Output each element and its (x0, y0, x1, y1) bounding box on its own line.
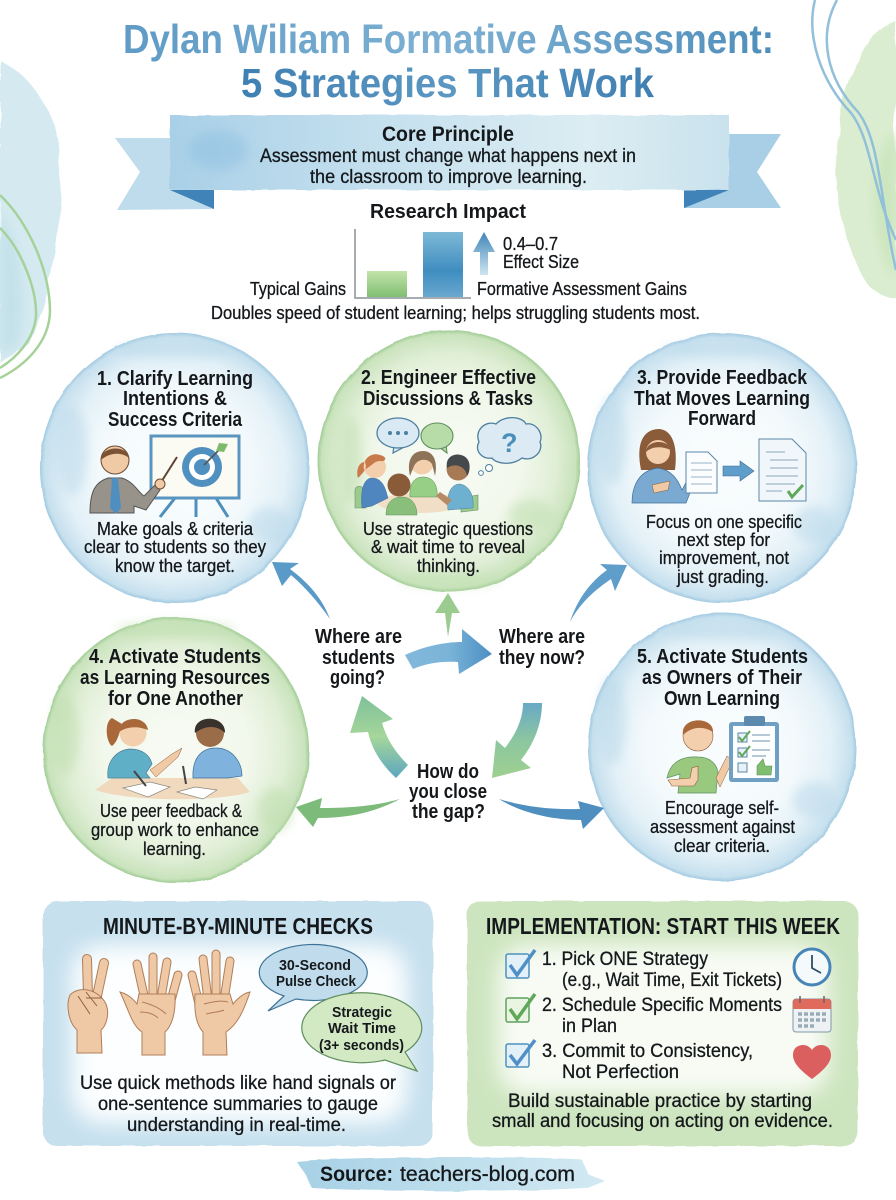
description: improvement, not (659, 548, 789, 568)
question: how do you close the gap: How do (417, 761, 479, 783)
icon: clock (794, 949, 830, 985)
callout: 30-second pulse check: Pulse Check (276, 973, 357, 990)
arrow: where are students going to where are they now (405, 629, 492, 674)
heading (634, 367, 810, 430)
bar chart: research impact (250, 229, 687, 299)
question: how do you close the gap (409, 761, 487, 823)
label: formative assessment gains: Formative Assessment Gains (477, 279, 687, 299)
decorative curves: bottom left (0, 195, 50, 378)
heading: 4. Activate Students (89, 646, 261, 668)
description (650, 798, 795, 856)
callout: strategic wait time (302, 993, 422, 1071)
source text: Source: (320, 1163, 393, 1186)
heading: Success Criteria (108, 409, 243, 431)
label: effect size (503, 234, 579, 272)
banner folds (170, 190, 729, 209)
icon: students working together (95, 718, 250, 799)
question: where are students going: students (322, 647, 395, 669)
description: next step for (677, 530, 770, 550)
label: typical gains: Typical Gains (250, 279, 346, 299)
step 2: in Plan (562, 1016, 617, 1037)
description: learning. (143, 839, 206, 859)
core principle heading: Core Principle (382, 123, 514, 146)
description: Encourage self- (665, 798, 779, 818)
panel wash (498, 945, 828, 1095)
heading: Intentions & (123, 388, 227, 410)
callout: strategic wait time: (3+ seconds) (319, 1037, 404, 1054)
description: & wait time to reveal (371, 537, 525, 557)
icon: calendar (793, 996, 831, 1032)
callout: strategic wait time: Strategic (332, 1004, 392, 1021)
question: where are they now (499, 626, 585, 669)
arrow: up to strategy 2 (435, 593, 460, 637)
heading: 1. Clarify Learning (97, 368, 253, 390)
icon: open hand signal (120, 957, 178, 1055)
description: Focus on one specific (646, 512, 802, 532)
icon: blue check 3 (506, 1040, 535, 1067)
icon: green check 2 (506, 994, 535, 1022)
description: small and focusing on acting on evidence. (492, 1111, 833, 1132)
question: where are they now: they now? (499, 647, 585, 669)
wash blotches (51, 622, 293, 832)
step 3: 3. Commit to Consistency, (542, 1041, 753, 1062)
heading: Forward (688, 408, 756, 430)
panel: strategy 1 (40, 333, 310, 603)
description (492, 1091, 833, 1132)
heading: 3. Provide Feedback (637, 367, 808, 389)
panel: strategy 2 (318, 330, 580, 592)
description: Use peer feedback & (100, 801, 242, 821)
icon: open hand signal mirrored (192, 954, 250, 1055)
heading: MINUTE-BY-MINUTE CHECKS (103, 913, 373, 939)
label: effect size: Effect Size (503, 252, 579, 272)
banner body (170, 115, 729, 190)
heading (637, 646, 808, 710)
question: how do you close the gap: the gap? (412, 801, 485, 823)
description (363, 519, 533, 576)
panel: strategy 3 (587, 333, 857, 603)
description: thinking. (417, 556, 480, 576)
heading: for One Another (108, 688, 243, 710)
description: Make goals & criteria (97, 519, 254, 539)
description: just grading. (676, 567, 769, 587)
heading: 2. Engineer Effective (361, 367, 536, 389)
bar: typical gains (367, 271, 407, 297)
bar: formative gains (423, 232, 463, 297)
heading: as Owners of Their (642, 667, 802, 689)
step 3: Not Perfection (562, 1062, 679, 1083)
description: Use strategic questions (363, 519, 533, 539)
arrow: where are students going to strategy 1 (272, 562, 330, 619)
description (80, 1073, 397, 1136)
question: where are students going: going? (330, 667, 385, 689)
icon: heart (793, 1045, 831, 1079)
question: where are they now: Where are (499, 626, 585, 648)
question: where are students going: Where are (315, 626, 402, 648)
icon: peace hand signal (68, 959, 108, 1053)
description: assessment against (650, 817, 795, 837)
panel: strategy 4 (43, 617, 309, 883)
description: group work to enhance (91, 820, 259, 840)
research impact heading: Research Impact (370, 201, 526, 223)
label: effect size: 0.4–0.7 (503, 234, 558, 254)
heading: as Learning Resources (80, 667, 270, 689)
step 1: 1. Pick ONE Strategy (542, 949, 708, 970)
callout: strategic wait time: Wait Time (328, 1020, 396, 1037)
title: 5 Strategies That Work (241, 60, 654, 106)
wash blotches (598, 624, 837, 818)
heading: Own Learning (664, 688, 780, 710)
banner wash (188, 130, 248, 170)
panel wash (72, 945, 407, 1123)
question: how do you close the gap: you close (409, 781, 487, 803)
background wash: right green (835, 22, 896, 298)
heading (97, 368, 253, 431)
panel: strategy 5 (588, 613, 856, 881)
core principle text: Assessment must change what happens next in (260, 146, 636, 167)
source text (320, 1163, 575, 1186)
arrow: close the gap to strategy 4 (296, 798, 400, 827)
source text: teachers-blog.com (400, 1163, 575, 1186)
arrow: effect size (473, 232, 495, 275)
step 1: (e.g., Wait Time, Exit Tickets) (562, 970, 782, 991)
icon: blue check 1 (506, 950, 535, 978)
description: clear criteria. (674, 836, 770, 856)
core principle text (260, 146, 636, 188)
arrow: where are they now to strategy 3 (570, 564, 627, 622)
title: Dylan Wiliam Formative Assessment: (123, 16, 774, 62)
wash blotches (56, 342, 292, 543)
banner right tail (684, 134, 781, 208)
wash blotches (598, 342, 837, 543)
core principle text: the classroom to improve learning. (310, 167, 587, 188)
step 1 (542, 949, 782, 991)
icon: student with checklist (667, 716, 779, 793)
source strip (297, 1158, 605, 1191)
background wash: left blue (0, 60, 60, 362)
description: understanding in real-time. (127, 1115, 346, 1136)
wash blotches (338, 415, 552, 587)
step 3 (542, 1041, 753, 1083)
question: where are students going (315, 626, 402, 689)
description (646, 512, 802, 587)
description: know the target. (115, 556, 235, 576)
description (84, 519, 266, 576)
icon: teacher and target board (90, 436, 239, 517)
icon: group discussion (355, 418, 541, 515)
title (123, 16, 774, 106)
arrow: close the gap to strategy 5 (499, 799, 604, 829)
step 2 (542, 995, 782, 1037)
research impact caption: Doubles speed of student learning; helps struggling students most. (211, 303, 700, 323)
heading: That Moves Learning (634, 388, 810, 410)
heading: Discussions & Tasks (363, 388, 533, 410)
panel: minute-by-minute checks (43, 901, 433, 1146)
description: Use quick methods like hand signals or (80, 1073, 397, 1094)
icon: group discussion: ? (501, 428, 518, 458)
heading (80, 646, 270, 710)
arrow: close the gap to where are students going (350, 696, 408, 778)
callout: 30-second pulse check: 30-Second (279, 957, 351, 974)
heading (361, 367, 536, 410)
description: one-sentence summaries to gauge (98, 1094, 378, 1115)
description (91, 801, 259, 859)
description: clear to students so they (84, 537, 266, 557)
description: Build sustainable practice by starting (508, 1091, 812, 1112)
banner left tail (115, 138, 214, 210)
panel: implementation (467, 901, 858, 1146)
heading: 5. Activate Students (637, 646, 808, 668)
decorative curves: top right (812, 0, 896, 270)
icon: teacher giving feedback (632, 429, 806, 503)
step 2: 2. Schedule Specific Moments (542, 995, 782, 1016)
callout: 30-second pulse check (259, 944, 367, 1011)
banner: core principle (115, 115, 781, 210)
arrow: where are they now to close the gap (492, 703, 542, 778)
